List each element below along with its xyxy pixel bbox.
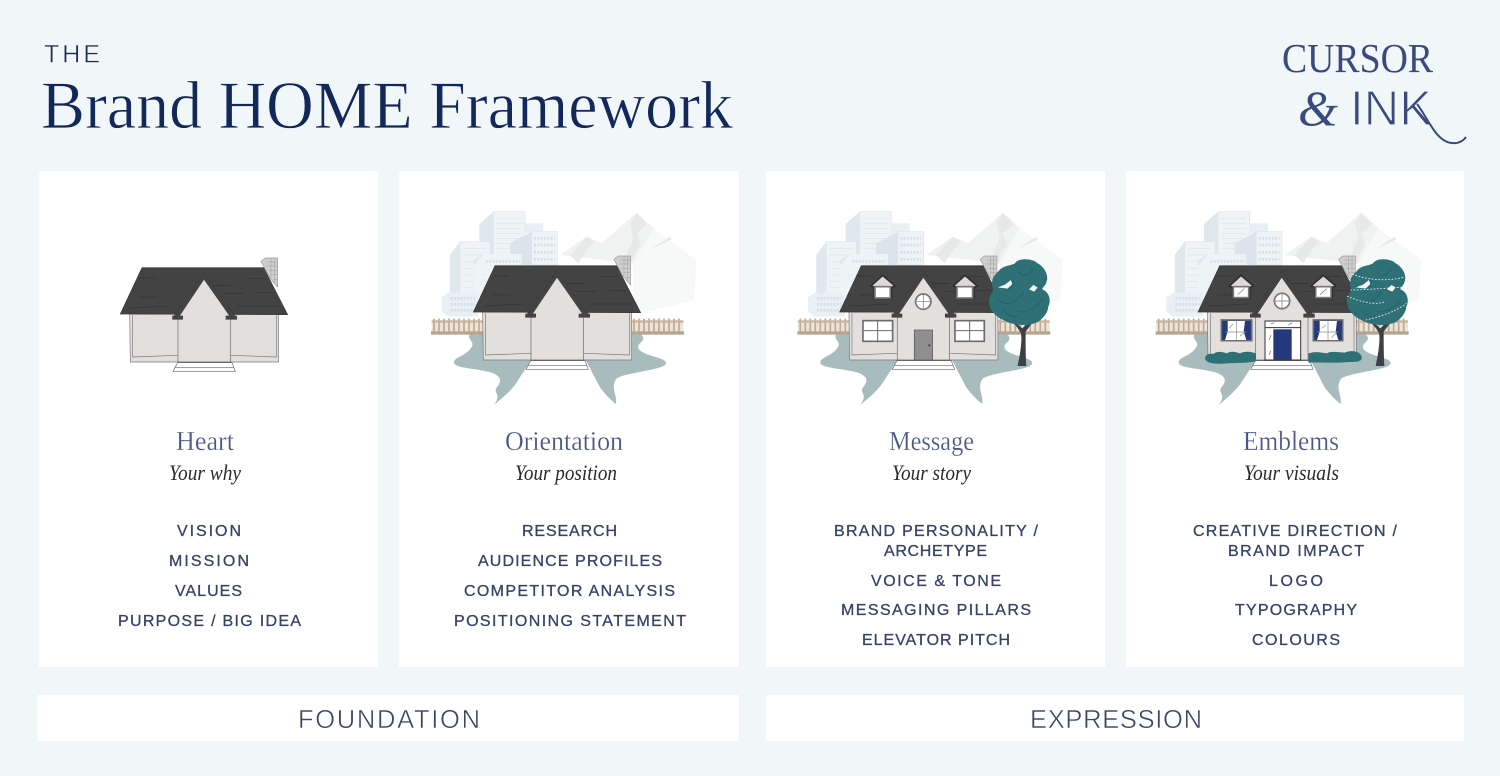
- list: Emblems items: [1193, 523, 1398, 649]
- heading: Message: Message: [889, 426, 974, 456]
- band: Expression: EXPRESSION: [1030, 706, 1202, 734]
- list: Emblems items: CREATIVE DIRECTION /: [1193, 523, 1398, 540]
- list: Emblems items: TYPOGRAPHY: [1235, 602, 1357, 619]
- list: Message items: VOICE & TONE: [871, 573, 1001, 590]
- title: THE: [44, 40, 100, 68]
- heading: Message: [889, 426, 974, 485]
- illustration: house with surroundings: [431, 212, 697, 405]
- heading: Emblems: [1243, 426, 1339, 485]
- heading: Heart: Heart: [176, 426, 234, 456]
- logo: Cursor & Ink: INK: [1350, 82, 1432, 136]
- list: Heart items: [118, 523, 301, 630]
- list: Emblems items: BRAND IMPACT: [1228, 543, 1364, 560]
- heading: Emblems: Your visuals: [1244, 460, 1339, 485]
- list: Message items: BRAND PERSONALITY /: [834, 523, 1039, 540]
- heading: Heart: Your why: [169, 460, 241, 485]
- illustration: bare house: [120, 258, 288, 371]
- heading: Message: Your story: [892, 460, 971, 485]
- list: Orientation items: AUDIENCE PROFILES: [478, 553, 662, 570]
- logo: Cursor & Ink: [1282, 35, 1466, 143]
- illustration: house with windows, door and tree: [797, 212, 1063, 405]
- list: Emblems items: COLOURS: [1252, 632, 1340, 649]
- list: Orientation items: RESEARCH: [522, 523, 617, 540]
- heading: Orientation: [505, 426, 623, 485]
- panel: Emblems: [1126, 171, 1464, 667]
- list: Emblems items: LOGO: [1269, 573, 1323, 590]
- heading: Orientation: Your position: [515, 460, 617, 485]
- list: Message items: ARCHETYPE: [884, 543, 987, 560]
- logo: Cursor & Ink: CURSOR: [1282, 35, 1434, 81]
- list: Message items: MESSAGING PILLARS: [841, 602, 1031, 619]
- heading: Heart: [169, 426, 241, 485]
- list: Message items: ELEVATOR PITCH: [862, 632, 1010, 649]
- list: Heart items: VISION: [177, 523, 241, 540]
- list: Heart items: VALUES: [175, 583, 242, 600]
- panel: Heart: [39, 171, 378, 667]
- illustration: fully decorated house: [1156, 212, 1421, 405]
- logo: Cursor & Ink: &: [1298, 80, 1338, 136]
- list: Heart items: PURPOSE / BIG IDEA: [118, 613, 301, 630]
- list: Orientation items: [454, 523, 686, 630]
- list: Orientation items: COMPETITOR ANALYSIS: [464, 583, 675, 600]
- heading: Orientation: Orientation: [505, 426, 623, 456]
- band: Foundation: [37, 695, 739, 741]
- panel: Message: [766, 171, 1105, 667]
- list: Orientation items: POSITIONING STATEMENT: [454, 613, 686, 630]
- band: Foundation: FOUNDATION: [298, 706, 480, 734]
- panel: Orientation: [399, 171, 739, 667]
- heading: Emblems: Emblems: [1243, 426, 1339, 456]
- band: Expression: [766, 695, 1464, 741]
- list: Message items: [834, 523, 1039, 649]
- title: Brand HOME Framework: [41, 67, 733, 143]
- list: Heart items: MISSION: [169, 553, 249, 570]
